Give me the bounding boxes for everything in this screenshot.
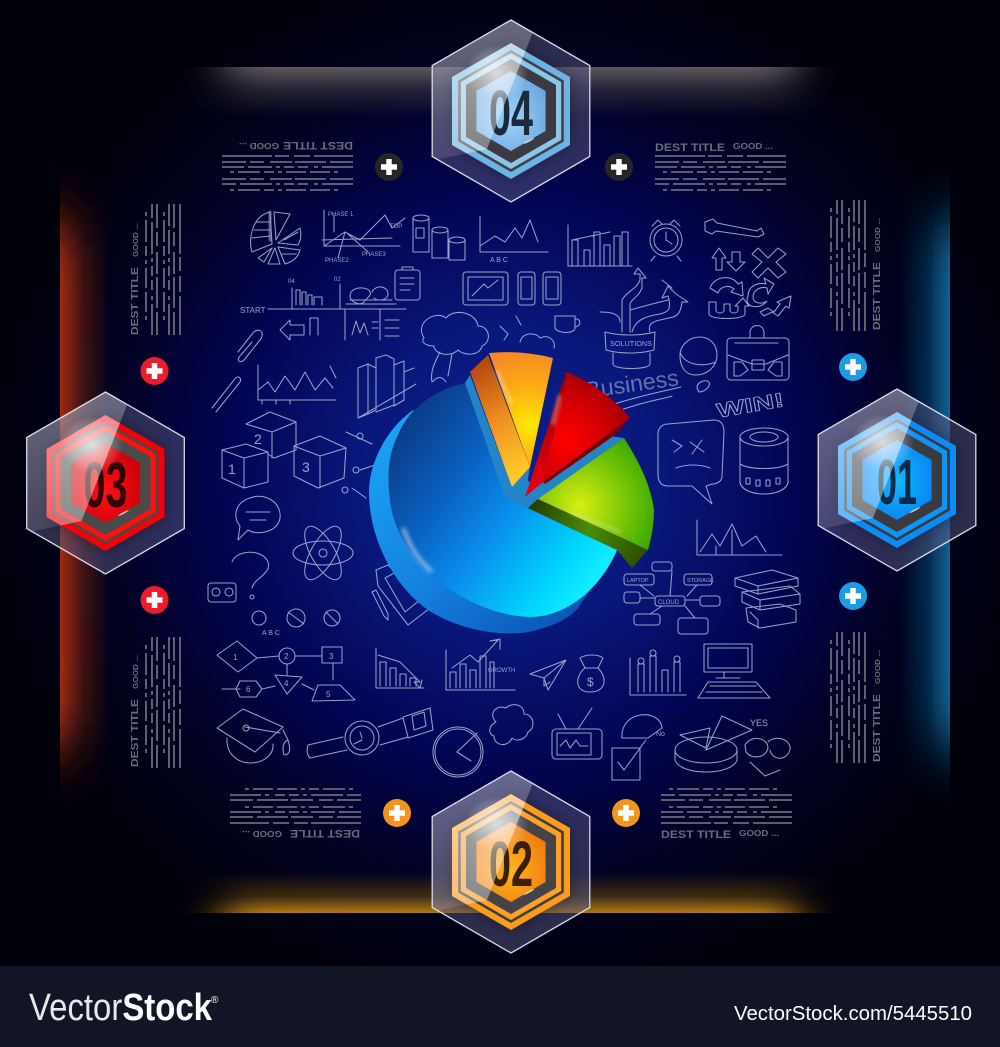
doodle: flow diagram: 4 bbox=[284, 679, 289, 688]
face sparkle bbox=[523, 137, 535, 145]
pie slice: green highlight bbox=[570, 512, 620, 532]
doodle: cloud network diagram: STORAGE bbox=[687, 578, 714, 584]
doodle: flow diagram: 6 bbox=[246, 685, 251, 694]
doodle: timeline bbox=[240, 277, 406, 340]
text block: left lower vertical: DEST TITLE bbox=[130, 699, 141, 767]
text block: bottom left: DEST TITLE bbox=[290, 827, 360, 839]
plus button: bottom left bbox=[383, 799, 411, 827]
glass highlight bbox=[431, 770, 538, 912]
hex light ring bbox=[55, 425, 156, 541]
text block: top left: GOOD ... bbox=[239, 141, 279, 150]
text block: bottom right: GOOD ... bbox=[739, 829, 779, 838]
hex inner face bbox=[862, 440, 932, 520]
face sparkle bbox=[118, 509, 129, 517]
plus button: right upper bbox=[839, 353, 867, 381]
doodle: cloud network diagram bbox=[624, 562, 720, 634]
pie slice: red highlight bbox=[553, 395, 560, 425]
doodle: planets: A B C bbox=[262, 630, 280, 637]
hex light ring bbox=[847, 422, 947, 538]
doodle: paperclips bbox=[212, 330, 262, 412]
doodle: money bag: $ bbox=[587, 675, 594, 689]
text block: right upper vertical: DEST TITLE bbox=[872, 262, 883, 330]
text block: right lower vertical bbox=[831, 632, 883, 763]
hex shadow bbox=[838, 412, 956, 548]
doodle: small bars chart bbox=[630, 650, 686, 695]
hex outer band bbox=[838, 412, 956, 548]
number 04: 04 bbox=[489, 77, 533, 149]
doodle: phase line chart bbox=[322, 210, 405, 264]
doodle: 3D bar columns bbox=[358, 355, 416, 418]
plus button: left upper bbox=[140, 357, 168, 385]
glass highlight bbox=[817, 388, 924, 530]
hex dark band bbox=[60, 431, 150, 535]
hex dark band bbox=[466, 810, 556, 914]
text block: left upper vertical: DEST TITLE bbox=[130, 267, 141, 335]
doodle: paint can bbox=[740, 428, 788, 494]
doodle: wall clock bbox=[433, 727, 483, 777]
doodle: phase line chart: PHASE 1 bbox=[328, 212, 354, 218]
doodle: rising line chart bbox=[480, 216, 548, 264]
doodle: money bag bbox=[578, 655, 604, 692]
doodle: bar chart bbox=[568, 225, 632, 266]
doodle: flow diagram bbox=[217, 641, 355, 701]
doodle: solutions plant arrows: SOLUTIONS bbox=[610, 341, 652, 348]
hex shadow bbox=[452, 794, 570, 930]
doodle: direction arrows bbox=[712, 248, 786, 278]
hexagon badge 03 bbox=[26, 391, 184, 574]
doodle: descending chart bbox=[376, 648, 424, 688]
text block: right upper vertical: GOOD ... bbox=[875, 218, 882, 252]
hex thin dark ring bbox=[844, 419, 950, 541]
hex light ring bbox=[461, 53, 561, 169]
hex glass base bbox=[432, 20, 590, 202]
pie slice: orange highlight bbox=[497, 370, 512, 403]
doodle: small line chart right bbox=[697, 520, 782, 555]
doodle: phase line chart: TOP bbox=[390, 224, 402, 230]
doodle: growth chart: GROWTH bbox=[488, 668, 515, 674]
doodle: coffee cup bbox=[555, 316, 580, 332]
doodle: wrench bbox=[705, 219, 764, 237]
text block: left lower vertical: GOOD ... bbox=[133, 655, 140, 689]
text block: bottom right bbox=[661, 789, 792, 841]
hex glass base bbox=[432, 771, 590, 953]
hex glass base bbox=[27, 392, 184, 574]
text block: bottom left bbox=[230, 789, 361, 839]
doodle: cut pie chart: No bbox=[656, 731, 665, 738]
hex light ring bbox=[461, 804, 561, 920]
doodle: flow diagram: 3 bbox=[329, 652, 334, 661]
doodle: flow diagram: 5 bbox=[326, 690, 331, 699]
doodle: network nodes bbox=[342, 432, 378, 498]
plus button: bottom right bbox=[612, 799, 640, 827]
text block: right upper vertical bbox=[831, 200, 883, 331]
doodle: eyeglasses bbox=[745, 738, 790, 776]
pie slice: orange side bbox=[470, 355, 530, 487]
doodle: phase line chart: PHASE3 bbox=[362, 252, 386, 258]
hex shadow bbox=[46, 415, 164, 551]
text block: bottom right: DEST TITLE bbox=[661, 829, 731, 841]
doodle: question mark bbox=[232, 552, 269, 599]
text block: left upper vertical bbox=[130, 204, 180, 335]
doodle: cloud network diagram: LAPTOP bbox=[627, 578, 649, 584]
doodle: desktop computer bbox=[698, 644, 770, 698]
hex thin dark ring bbox=[458, 801, 564, 923]
pie chart bbox=[369, 352, 654, 633]
doodle: solutions plant arrows bbox=[600, 268, 688, 368]
text block: top left bbox=[222, 139, 353, 190]
pie: blue top surface bbox=[389, 383, 617, 617]
face sparkle bbox=[909, 506, 921, 514]
hex dark band bbox=[852, 428, 942, 532]
pie: outer blue side bbox=[369, 410, 617, 633]
doodle: cans bbox=[413, 215, 465, 260]
face sparkle bbox=[523, 888, 535, 896]
text block: left lower vertical bbox=[130, 637, 180, 768]
footer bar bbox=[0, 966, 1000, 1047]
hexagon badge 02 bbox=[431, 770, 590, 953]
text block: top right bbox=[655, 142, 786, 190]
doodle: WIN lettering: WIN! bbox=[715, 389, 786, 423]
right blue glow band bbox=[900, 225, 950, 745]
doodle: graduation cap bbox=[217, 709, 290, 763]
text block: top right: GOOD ... bbox=[733, 142, 773, 151]
doodle: growth chart bbox=[446, 639, 515, 690]
doodle: wave line chart bbox=[258, 365, 336, 404]
hex inner face bbox=[71, 443, 140, 523]
doodle: sketched pie chart bbox=[251, 212, 301, 264]
hex inner face bbox=[476, 822, 546, 902]
doodle: Business lettering: Business bbox=[583, 364, 680, 403]
doodle: atom bbox=[293, 521, 353, 585]
doodle: thought bubble bbox=[236, 496, 280, 540]
doodle: speech bubble bbox=[658, 420, 724, 504]
doodle: clipboard bbox=[395, 267, 420, 300]
footer logo: VectorStock bbox=[29, 987, 213, 1029]
hex outer band bbox=[452, 43, 570, 179]
hex glass base bbox=[818, 389, 976, 571]
doodles: hand-drawn sketch icons bbox=[208, 210, 800, 780]
doodle: numbered cubes bbox=[222, 412, 346, 488]
hex outer band bbox=[46, 415, 164, 551]
doodle: stack of books bbox=[735, 570, 800, 628]
plus button: left lower bbox=[140, 586, 168, 614]
hex outer band bbox=[452, 794, 570, 930]
doodle: wristwatch bbox=[307, 708, 433, 758]
pie slice: red underside bbox=[543, 418, 630, 484]
hex shadow bbox=[452, 43, 570, 179]
glass highlight bbox=[26, 391, 132, 533]
doodle: paper plane bbox=[530, 660, 566, 690]
doodle: cut pie chart: YES bbox=[750, 718, 768, 728]
number 02: 02 bbox=[489, 828, 533, 900]
pie: inner wall behind slices bbox=[465, 375, 624, 508]
plus button: right lower bbox=[839, 582, 867, 610]
pie slice: green side bbox=[528, 499, 648, 568]
doodle: flow diagram: 1 bbox=[233, 653, 238, 662]
doodle: numbered cubes: 3 bbox=[302, 459, 310, 475]
hex dark band bbox=[466, 59, 556, 163]
bottom orange glow band bbox=[225, 872, 795, 913]
text block: right lower vertical: DEST TITLE bbox=[872, 694, 883, 762]
doodle: open book and pen bbox=[372, 565, 430, 625]
text block: left upper vertical: GOOD ... bbox=[133, 223, 140, 257]
doodle: curved arrows bbox=[709, 278, 791, 318]
plus button: top left bbox=[375, 153, 403, 181]
plus button: top right bbox=[605, 153, 633, 181]
doodle: cloud with label bbox=[500, 316, 554, 348]
left red glow band bbox=[60, 225, 110, 745]
glass highlight bbox=[431, 19, 538, 161]
doodle: brain cloud bbox=[490, 705, 533, 745]
doodle: flow diagram: 2 bbox=[284, 652, 289, 661]
doodle: timeline: START bbox=[240, 306, 266, 315]
doodle: cut pie chart bbox=[656, 716, 768, 772]
text block: bottom left: GOOD ... bbox=[242, 829, 282, 838]
text block: right lower vertical: GOOD ... bbox=[875, 650, 882, 684]
doodle: planets bbox=[252, 609, 340, 637]
doodle: timeline: 04 bbox=[288, 279, 295, 285]
doodle: checkbox and dome bbox=[612, 715, 662, 780]
doodle: cloud network diagram: CLOUD bbox=[658, 600, 680, 606]
doodle: tablet and phones bbox=[463, 272, 561, 305]
doodle: numbered cubes: 1 bbox=[228, 461, 236, 477]
number 03: 03 bbox=[84, 449, 128, 521]
hex thin dark ring bbox=[458, 50, 564, 172]
doodle: timeline: 02 bbox=[334, 277, 341, 283]
hex inner face bbox=[476, 71, 546, 151]
hex thin dark ring bbox=[53, 422, 158, 544]
top grey glow band bbox=[225, 67, 795, 117]
doodle: phase line chart: PHASE2 bbox=[325, 258, 349, 264]
pie slice: red top bbox=[543, 372, 630, 482]
pie slice: orange top bbox=[489, 352, 553, 467]
doodle: briefcase bbox=[727, 326, 789, 380]
pie slice: green top bbox=[538, 438, 654, 550]
doodle: television bbox=[552, 708, 602, 759]
doodle: rising line chart: A B C bbox=[490, 257, 508, 264]
doodle: glasses bbox=[208, 583, 236, 602]
doodle: helmet ball bbox=[680, 337, 717, 392]
text block: top left: DEST TITLE bbox=[283, 139, 353, 151]
hexagon badge 04 bbox=[431, 19, 590, 202]
number 01: 01 bbox=[877, 446, 917, 518]
doodle: numbered cubes: 2 bbox=[254, 431, 262, 447]
doodle: thinking cloud bbox=[421, 312, 488, 382]
footer image id: VectorStock.com/5445510 bbox=[734, 1003, 972, 1025]
hexagon badge 01 bbox=[817, 388, 976, 571]
pie: rim highlight bbox=[403, 528, 432, 572]
pie slice: red side bbox=[525, 372, 567, 497]
doodle: alarm clock bbox=[650, 220, 682, 261]
footer registered mark: ® bbox=[211, 995, 219, 1006]
text block: top right: DEST TITLE bbox=[655, 142, 725, 154]
